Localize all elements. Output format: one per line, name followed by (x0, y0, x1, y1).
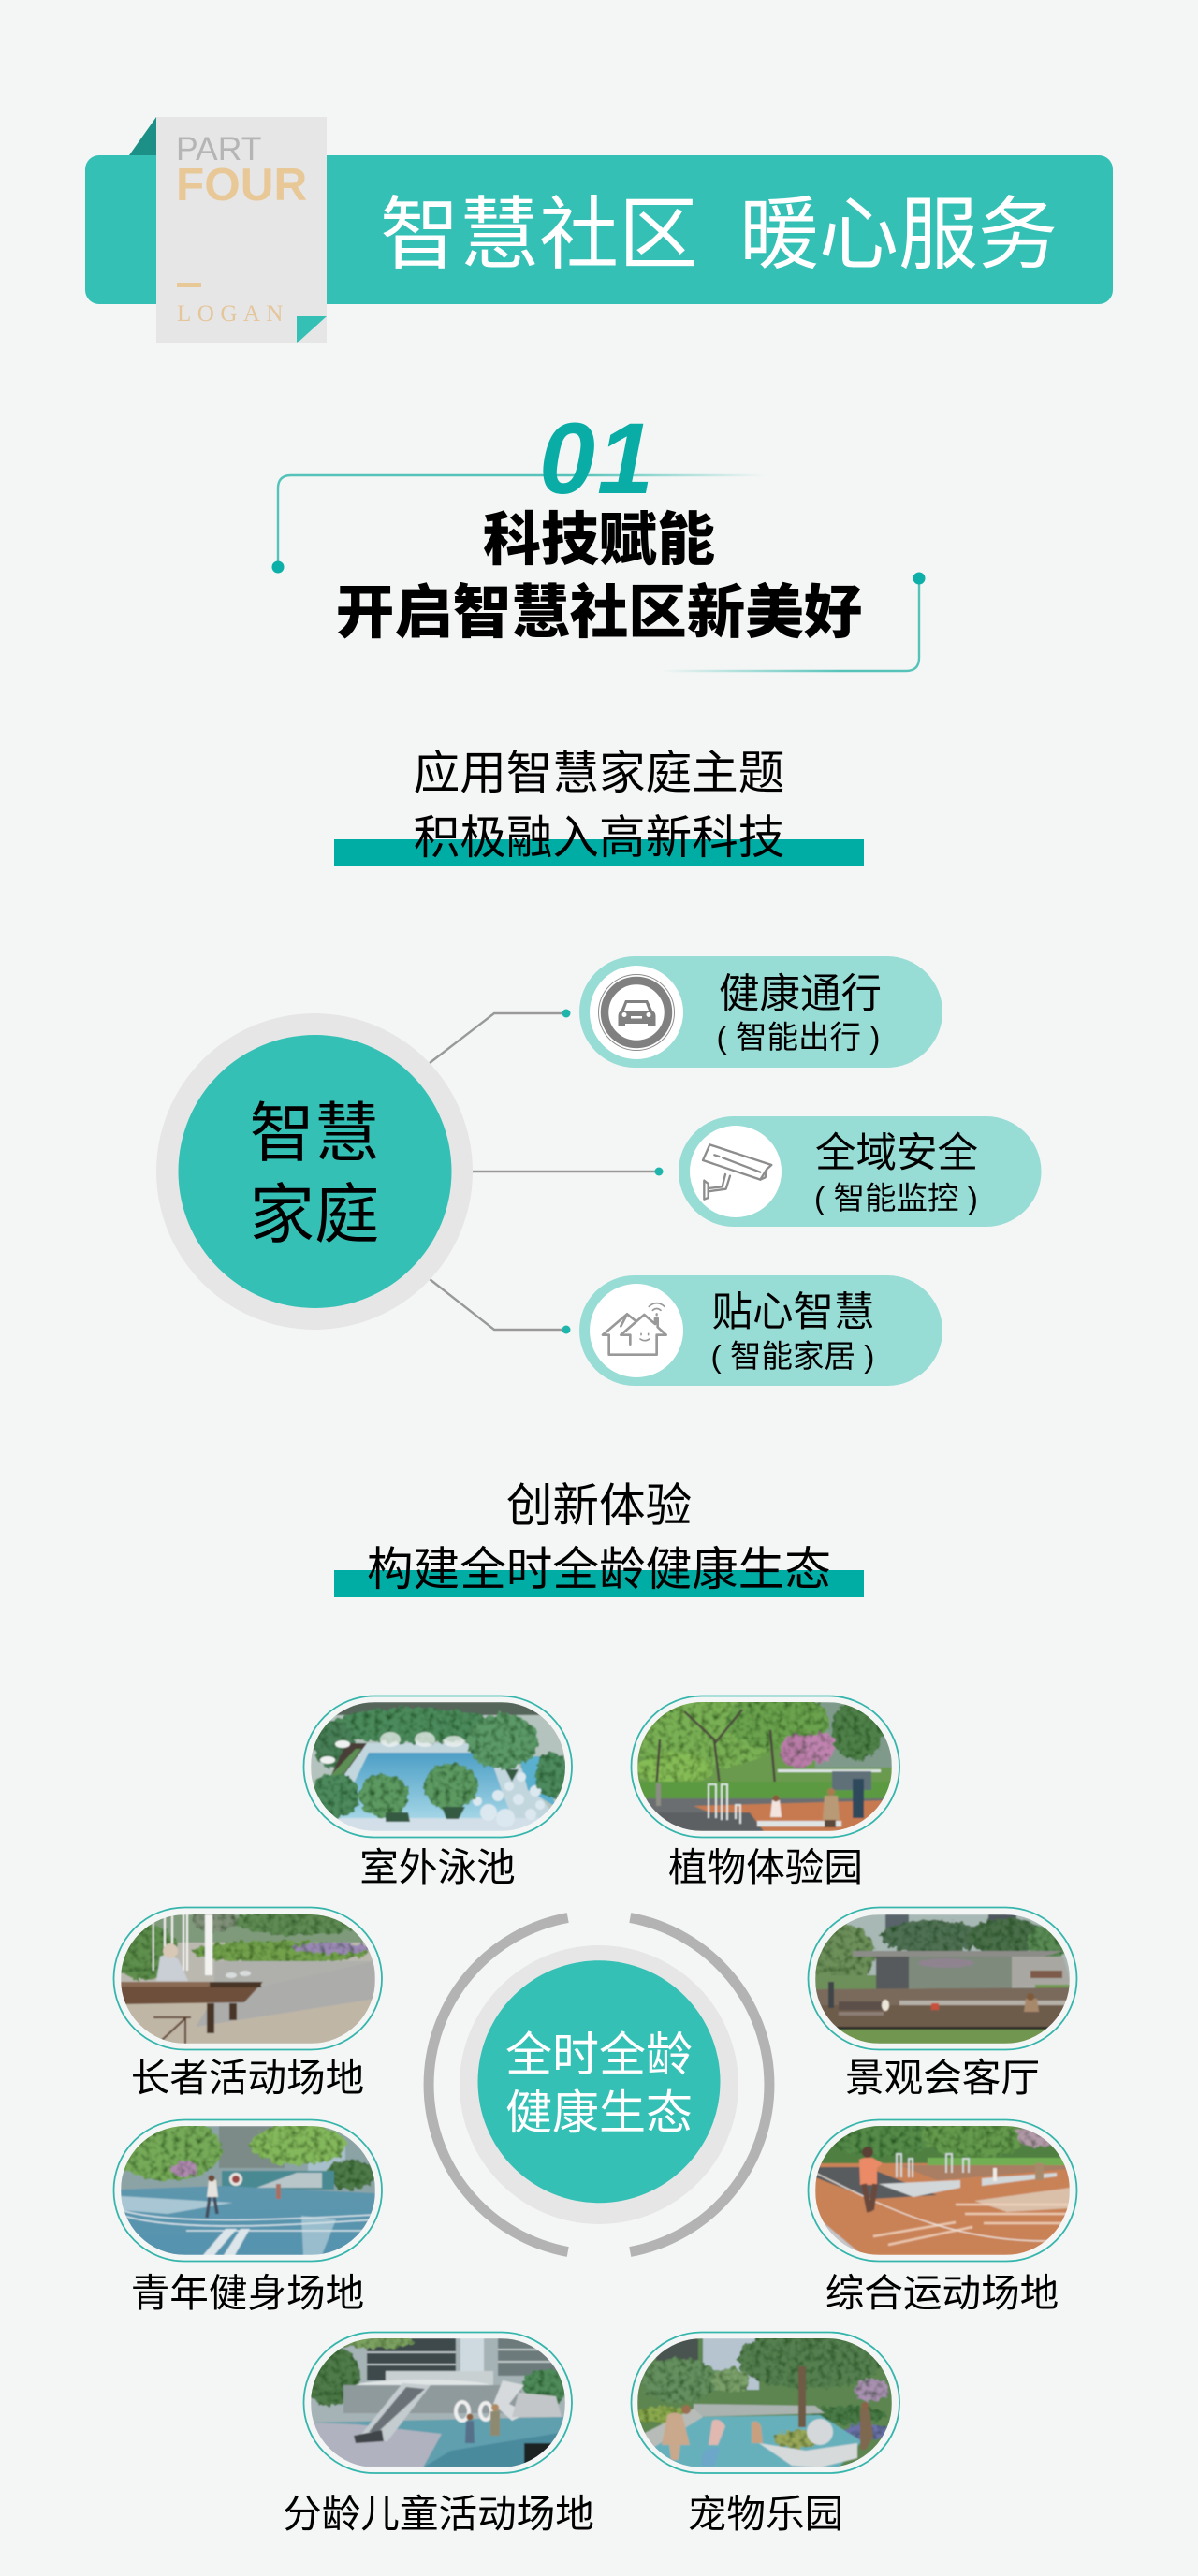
subheading: smart home theme (334, 747, 864, 866)
pill: 全域安全: ( 智能监控 ) (814, 1182, 978, 1216)
smart home diagram (156, 956, 1041, 1386)
title: 智慧社区 暖心服务: 暖心服务 (739, 191, 1058, 280)
photo card: multi-sport area (809, 2117, 1076, 2261)
photo card: landscape lounge (809, 1907, 1076, 2049)
photo card: outdoor pool (303, 1696, 572, 1838)
icon: smart house (603, 1303, 666, 1355)
connectors (430, 1009, 663, 1334)
central circle: 智慧家庭: 家庭 (249, 1178, 380, 1251)
subheading: health ecosystem: 构建全时全龄健康生态 (367, 1543, 831, 1595)
label: kids area: 分龄儿童活动场地 (283, 2492, 594, 2536)
subheading: smart home theme: 应用智慧家庭主题 (414, 747, 784, 799)
section heading 01 (271, 401, 925, 671)
folded paper tag (129, 117, 327, 343)
top-left frame line with dot (271, 475, 765, 573)
folded paper tag: FOUR (176, 159, 307, 211)
pill: 贴心智慧 (579, 1275, 942, 1386)
icon: security camera (703, 1144, 771, 1200)
label: youth fitness: 青年健身场地 (131, 2271, 364, 2315)
photo card: plant garden (623, 1691, 899, 1838)
heading text: 开启智慧社区新美好 (336, 580, 862, 646)
subheading: health ecosystem: 创新体验 (506, 1479, 692, 1532)
folded paper tag: LOGAN (177, 301, 289, 327)
bottom-right frame line with dot (661, 573, 925, 671)
caption labels (131, 1845, 1059, 2536)
pill: 贴心智慧: ( 智能家居 ) (711, 1340, 874, 1375)
central circle: 智慧家庭 (156, 1013, 473, 1330)
photo card: youth fitness area (113, 2118, 382, 2261)
photo card: senior activity area (111, 1906, 382, 2049)
photo card: kids activity area (301, 2332, 572, 2473)
label: senior area: 长者活动场地 (131, 2056, 364, 2100)
subheading: health ecosystem (334, 1479, 864, 1597)
banner bar (85, 155, 1113, 304)
pill: 健康通行: 健康通行 (719, 972, 882, 1017)
label: outdoor pool: 室外泳池 (359, 1845, 516, 1889)
number 01: 01 (539, 401, 655, 515)
label: plant garden: 植物体验园 (668, 1845, 863, 1889)
central ring: 全时全龄健康生态 (429, 1918, 769, 2251)
heading text: 科技赋能 (483, 508, 715, 573)
folded paper tag: PART (176, 130, 261, 167)
title: 智慧社区 暖心服务: 智慧社区 (380, 191, 698, 280)
photo card: pet park (631, 2329, 899, 2473)
section banner (85, 117, 1113, 343)
icon: car in ring (599, 975, 674, 1050)
subheading: smart home theme: 积极融入高新科技 (414, 811, 784, 864)
pill: 全域安全: 全域安全 (815, 1131, 978, 1176)
central circle: 智慧家庭: 智慧 (249, 1097, 380, 1170)
pill: 全域安全 (679, 1116, 1041, 1227)
heading text (336, 508, 862, 646)
central ring: 全时全龄健康生态: 健康生态 (505, 2087, 693, 2139)
central ring: 全时全龄健康生态: 全时全龄 (505, 2029, 693, 2081)
label: landscape lounge: 景观会客厅 (845, 2056, 1040, 2100)
pill: 健康通行 (579, 956, 942, 1068)
pill: 健康通行: ( 智能出行 ) (717, 1021, 880, 1055)
label: pet park: 宠物乐园 (688, 2492, 843, 2536)
label: multi-sport: 综合运动场地 (825, 2271, 1059, 2315)
pill: 贴心智慧: 贴心智慧 (711, 1290, 874, 1335)
